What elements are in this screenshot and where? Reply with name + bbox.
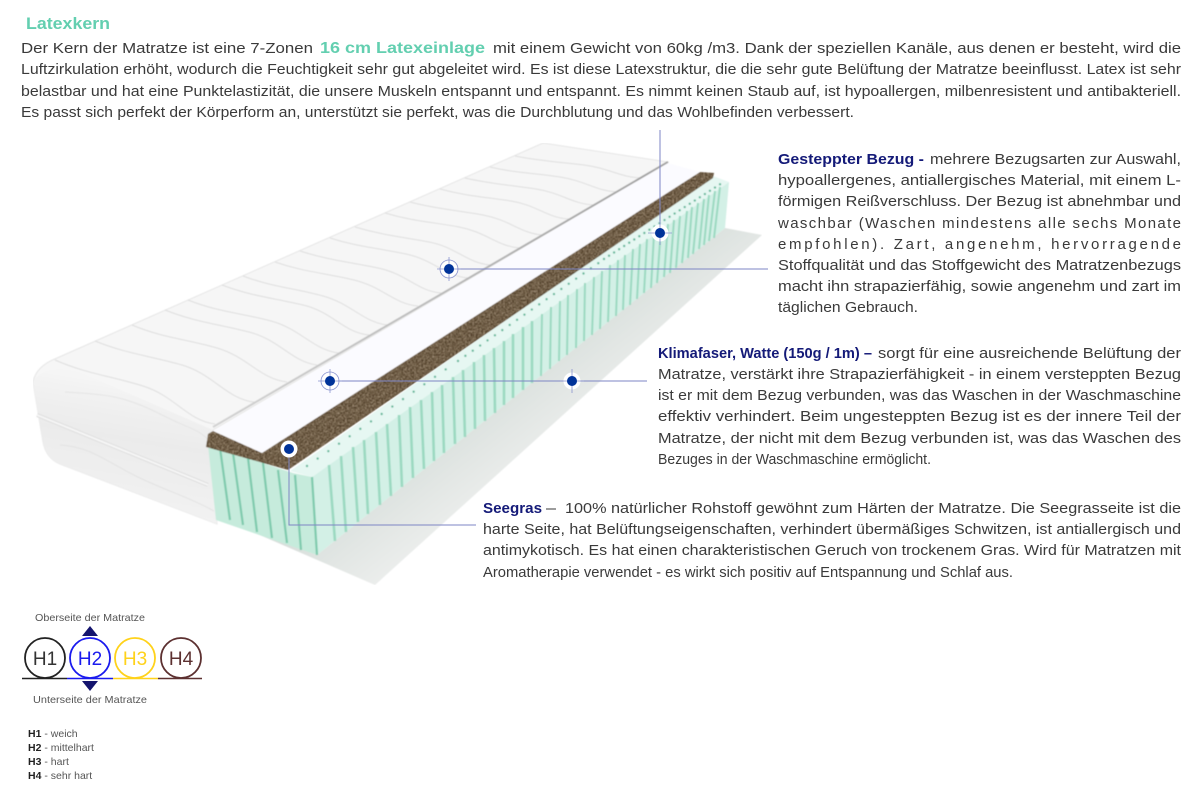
- icon: up arrow: [82, 626, 98, 636]
- callout: leader lines: [289, 130, 768, 525]
- quilting wave lines: [55, 156, 641, 511]
- text block: Klimafaser, Watte: Matratze, der nicht mit dem Bezug verbunden ist, was das Waschen des: [658, 430, 1181, 447]
- text block: Latexkern description: Es passt sich perfekt der Körperform an, unterstützt sie perfekt, was die Durchblutung und das Wohlbefinden verbessert.: [21, 104, 854, 121]
- legend: firmness key: [28, 728, 94, 782]
- label: top side: Oberseite der Matratze: [35, 612, 145, 624]
- legend: firmness key: H4 - sehr hart: [28, 770, 92, 782]
- text block: Latexkern description: Der Kern der Matratze ist eine 7-Zonen: [21, 40, 313, 57]
- text block: Gesteppter Bezug: täglichen Gebrauch.: [778, 299, 918, 316]
- circle H4: [161, 638, 201, 678]
- text block: Seegras: antimykotisch. Es hat einen charakteristischen Geruch von trockenem Gras. Wird für Matratzen mit: [483, 542, 1182, 559]
- text block: Latexkern description: Luftzirkulation erhöht, wodurch die Feuchtigkeit sehr gut abgeleitet wird. Es ist diese Latexstruktur, die die sehr gute Belüftung der Matratze beeinflusst. Latex ist sehr: [21, 61, 1181, 78]
- icon: down arrow: [82, 681, 98, 691]
- text block: Gesteppter Bezug: [777, 151, 1181, 316]
- circle H3: [115, 638, 155, 678]
- legend: firmness scale: [22, 612, 202, 706]
- text block: Seegras: Seegras: [483, 500, 542, 517]
- circle H2: [70, 638, 110, 678]
- text block: Klimafaser, Watte: Bezuges in der Waschmaschine ermöglicht.: [658, 451, 931, 468]
- text block: Seegras: –: [546, 500, 557, 517]
- marker: fibre left: [318, 369, 342, 393]
- base sheet under mattress: [225, 228, 762, 585]
- legend: firmness key: H2 - mittelhart: [28, 742, 94, 754]
- text block: Gesteppter Bezug: empfohlen). Zart, angenehm, hervorragende: [778, 236, 1181, 253]
- text block: Seegras: 100% natürlicher Rohstoff gewöhnt zum Härten der Matratze. Die Seegrasseite ist die: [565, 500, 1181, 517]
- baseline: [22, 678, 202, 680]
- marker: latex core: [648, 221, 672, 245]
- ribs on right side far: [541, 187, 720, 376]
- circle H3: H3: [123, 649, 147, 670]
- text block: Klimafaser, Watte: Matratze, verstärkt ihre Strapazierfähigkeit - in einem versteppten Bezug: [658, 366, 1181, 383]
- text block: Gesteppter Bezug: Stoffqualität und das Stoffgewicht des Matratzenbezugs: [778, 257, 1181, 274]
- text block: Klimafaser, Watte: [658, 345, 1181, 468]
- illustration: mattress cross-section: [33, 143, 762, 585]
- text block: Klimafaser, Watte: Klimafaser, Watte (150g / 1m) –: [658, 345, 872, 362]
- circle H1: H1: [33, 649, 57, 670]
- legend: firmness key: H1 - weich: [28, 728, 78, 740]
- marker: cover: [437, 257, 461, 281]
- text block: Klimafaser, Watte: effektiv verhindert. Beim ungesteppten Bezug ist es der innere Teil der: [658, 408, 1181, 425]
- seagrass coir layer: [206, 172, 714, 470]
- text block: Seegras: [483, 500, 1182, 581]
- circle H2: H2: [78, 649, 102, 670]
- ribs on front side: [220, 448, 317, 555]
- text block: Gesteppter Bezug: förmigen Reißverschluss. Der Bezug ist abnehmbar und: [778, 193, 1181, 210]
- latex core front side: [208, 445, 317, 555]
- cover cut edge: [213, 162, 668, 427]
- heading: Latexkern: Latexkern: [26, 14, 110, 33]
- quilted cover front side: [33, 369, 217, 524]
- text block: Seegras: harte Seite, hat Belüftungseigenschaften, verhindert übermäßiges Schwitzen, ist antiallergisch und: [483, 521, 1181, 538]
- zipper line: [37, 415, 208, 485]
- text block: Klimafaser, Watte: ist er mit dem Bezug verbunden, was das Waschen in der Waschmaschine: [658, 387, 1181, 404]
- ventilation holes: [307, 183, 722, 466]
- text block: Gesteppter Bezug: hypoallergenes, antiallergisches Material, mit einem L-: [778, 172, 1181, 189]
- legend: firmness key: H3 - hart: [28, 756, 69, 768]
- circle H4: H4: [169, 649, 194, 670]
- text block: Latexkern description: belastbar und hat eine Punktelastizität, die unsere Muskeln entspannt und entspannt. Es nimmt keinen Staub auf, ist hypoallergen, milbenresistent und antibakteriell.: [21, 83, 1181, 100]
- text block: Latexkern description: mit einem Gewicht von 60kg /m3. Dank der speziellen Kanäle, aus denen er besteht, wird die: [493, 40, 1181, 57]
- circle H1: [25, 638, 65, 678]
- quilted cover silhouette: [33, 143, 668, 524]
- label: bottom side: Unterseite der Matratze: [33, 694, 147, 706]
- marker: fibre right: [560, 369, 584, 393]
- text block: Seegras: Aromatherapie verwendet - es wirkt sich positiv auf Entspannung und Schlaf aus.: [483, 564, 1013, 581]
- white foam layer: [213, 163, 700, 453]
- text block: Latexkern description: 16 cm Latexeinlage: [320, 40, 485, 57]
- text block: Latexkern description: [21, 40, 1181, 121]
- text block: Gesteppter Bezug: mehrere Bezugsarten zur Auswahl,: [930, 151, 1181, 168]
- text block: Gesteppter Bezug: Gesteppter Bezug -: [778, 151, 924, 168]
- text block: Gesteppter Bezug: waschbar (Waschen mindestens alle sechs Monate: [777, 215, 1181, 232]
- ribs on right side near: [329, 321, 532, 541]
- text block: Gesteppter Bezug: macht ihn strapazierfähig, sowie angenehm und zart im: [778, 278, 1181, 295]
- latex core right side: [312, 182, 729, 555]
- latex core top with holes: [290, 176, 729, 477]
- text block: Klimafaser, Watte: sorgt für eine ausreichende Belüftung der: [878, 345, 1181, 362]
- marker: seagrass: [280, 440, 298, 458]
